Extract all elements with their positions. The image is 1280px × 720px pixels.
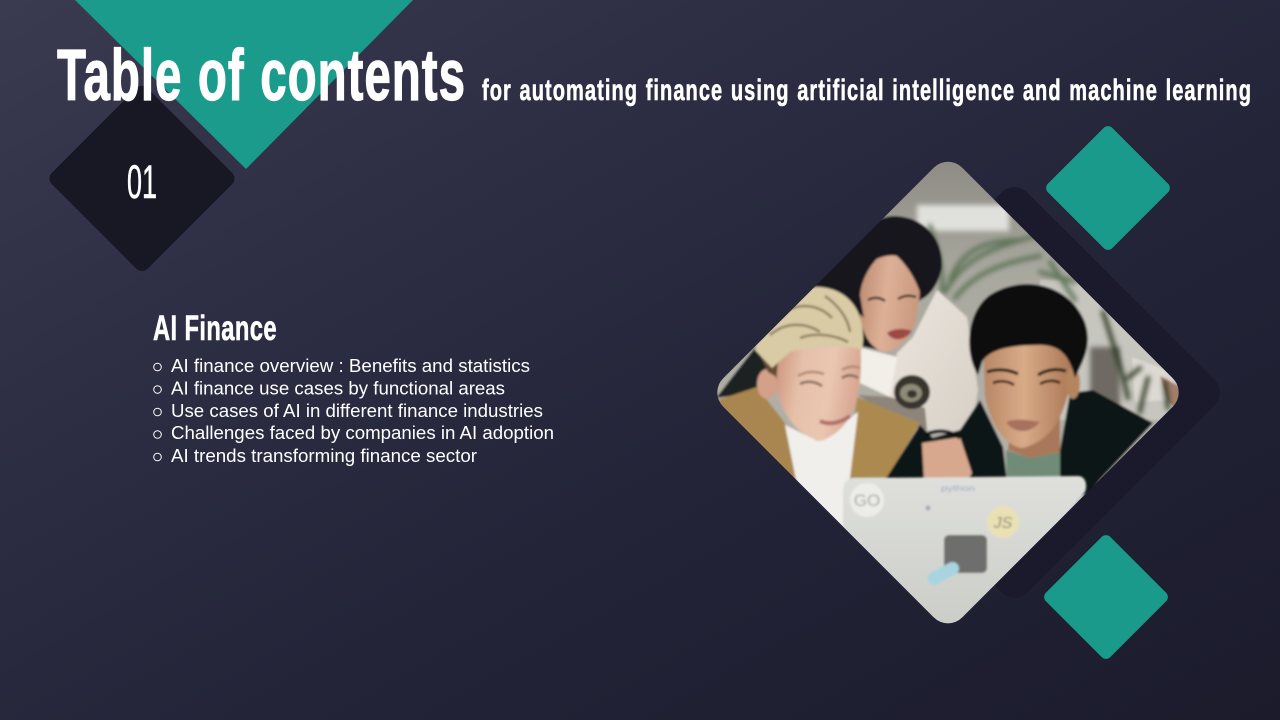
sweater of middle person <box>890 290 978 437</box>
dark number diamond <box>46 83 238 274</box>
bullet item 1: AI finance overview : Benefits and statistics <box>171 355 530 376</box>
sticker: small label: python <box>941 484 975 493</box>
sweater graphic <box>894 375 930 409</box>
sticker: blue clip <box>926 560 960 586</box>
sticker: grey square <box>944 535 987 573</box>
bullet list <box>154 355 554 466</box>
sage t-shirt <box>1006 450 1060 480</box>
tan jacket <box>718 386 797 480</box>
fringe of middle person <box>858 254 922 318</box>
sticker: JS <box>987 506 1019 538</box>
afro hair <box>969 284 1088 378</box>
blond hair <box>755 287 863 368</box>
section heading: AI Finance <box>153 309 277 348</box>
pointing hand <box>922 437 972 480</box>
teal triangle at top <box>75 0 413 169</box>
title main: Table of contents <box>57 36 466 116</box>
neck <box>1008 415 1060 458</box>
face of middle person <box>860 256 920 352</box>
dark diamond behind photo <box>802 180 1227 605</box>
sticker: GO <box>850 483 884 517</box>
face of right person <box>983 335 1073 448</box>
face of blond person <box>776 335 861 441</box>
title <box>57 36 1252 116</box>
teal diamond bottom right <box>1042 533 1170 661</box>
photo: three colleagues looking at a laptop <box>717 162 1179 624</box>
teal diamond top right <box>1044 124 1172 252</box>
black jacket <box>885 390 1153 495</box>
bullet item 5: AI trends transforming finance sector <box>171 445 477 466</box>
number 01: 01 <box>127 155 157 208</box>
bullet item 4: Challenges faced by companies in AI adoption <box>171 422 554 443</box>
sticker: GO: GO <box>854 491 880 510</box>
bullet item 2: AI finance use cases by functional areas <box>171 378 505 398</box>
ear <box>757 369 777 399</box>
dark hair backing <box>812 216 942 350</box>
side hair of blond person <box>760 356 778 376</box>
laptop <box>843 476 1086 640</box>
sticker: JS: JS <box>993 515 1013 532</box>
bullet item 3: Use cases of AI in different finance industries <box>171 400 543 421</box>
white t-shirt <box>785 412 858 530</box>
black shape behind hand <box>885 425 935 480</box>
